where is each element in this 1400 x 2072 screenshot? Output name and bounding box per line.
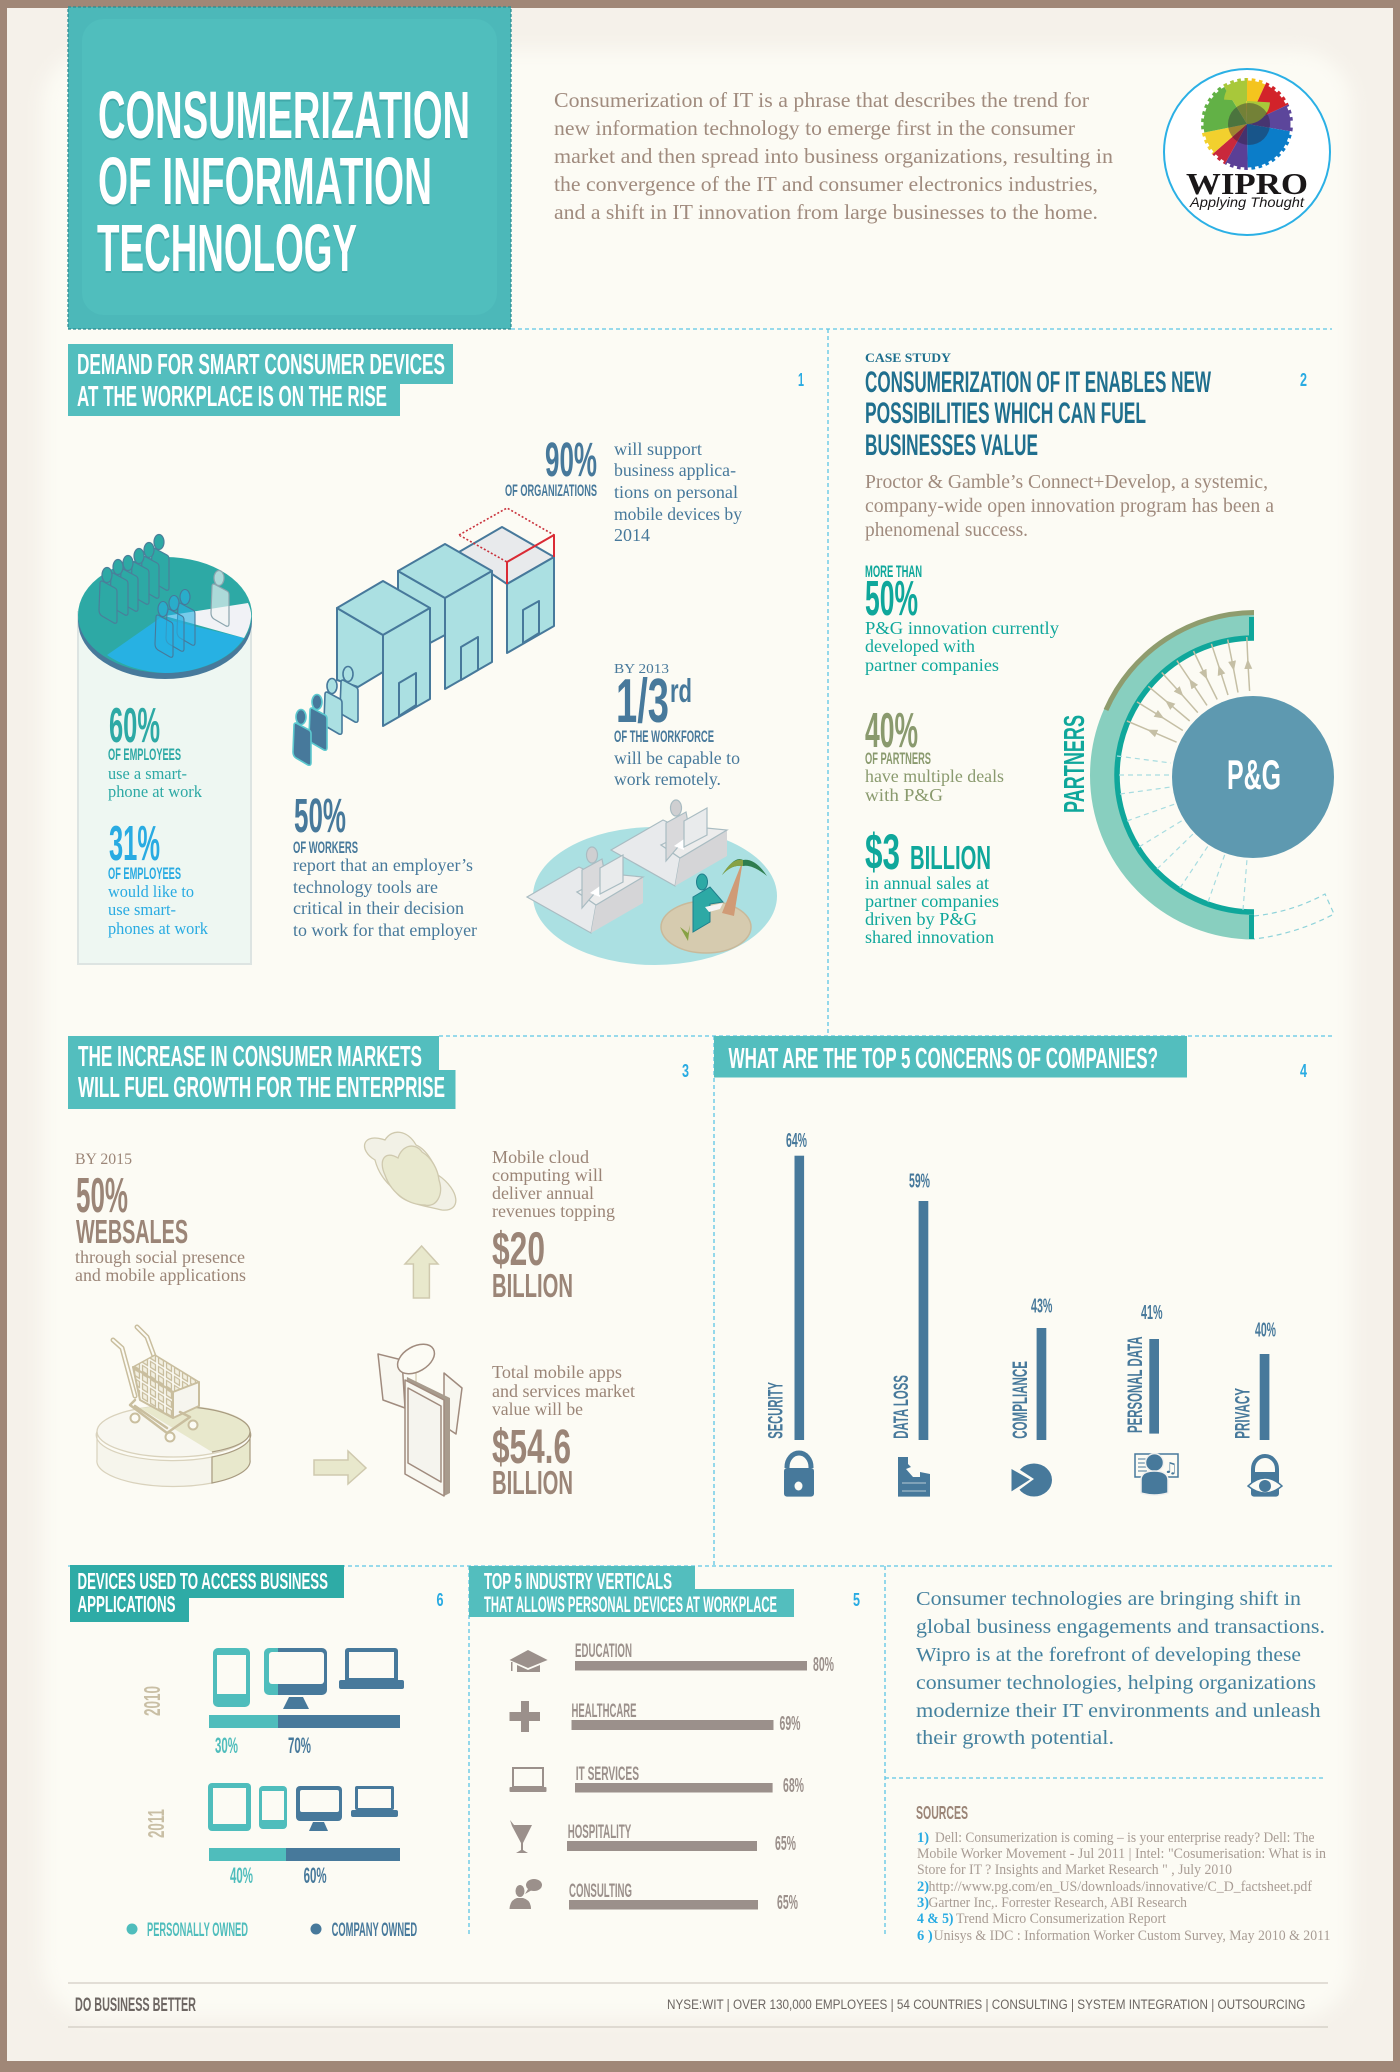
heading 3: WILL FUEL GROWTH FOR THE ENTERPRISE — [78, 1072, 445, 1104]
arrow: right — [314, 1451, 366, 1484]
row: hospitality 65%: 65% — [775, 1833, 796, 1855]
row: it services 68%: 68% — [783, 1775, 804, 1797]
stat: 50% websales: through social presence — [75, 1247, 245, 1267]
closing statement: Wipro is at the forefront of developing these — [916, 1644, 1301, 1666]
partner diagram — [1059, 612, 1334, 939]
bar: compliance 43%: 43% — [1031, 1295, 1053, 1317]
intro paragraph — [554, 88, 1114, 224]
intro paragraph: Consumerization of IT is a phrase that describes the trend for — [554, 88, 1089, 112]
stat: one third: work remotely. — [614, 769, 721, 789]
stat: $20 billion: Mobile cloud — [492, 1147, 589, 1167]
sources: http://www.pg.com/en_US/downloads/innovative/C_D_factsheet.pdf — [928, 1879, 1312, 1895]
stat: 60% — [108, 699, 202, 801]
sources: Gartner Inc,. Forrester Research, ABI Research — [928, 1895, 1188, 1911]
stat: one third: rd — [670, 672, 692, 709]
heading 6 — [70, 1565, 344, 1622]
stat: 40% of partners: OF PARTNERS — [865, 749, 931, 768]
stat: 31%: use smart- — [108, 900, 176, 919]
stat: 50% of workers: critical in their decision — [293, 898, 464, 918]
panel: devices used: COMPANY OWNED — [332, 1920, 417, 1941]
heading 5: TOP 5 INDUSTRY VERTICALS — [484, 1568, 672, 1594]
stat: 50% websales: 50% — [76, 1169, 128, 1223]
sources: Dell: Consumerization is coming – is your enterprise ready? Dell: The — [935, 1830, 1314, 1846]
heading 5 — [469, 1566, 794, 1617]
stat: $3 billion: partner companies — [865, 891, 999, 911]
stat: 31%: OF EMPLOYEES — [108, 864, 181, 883]
row: healthcare 69%: 69% — [780, 1713, 801, 1735]
stat: more than 50% — [865, 562, 1059, 675]
pie chart — [78, 534, 252, 679]
row: consulting 65%: CONSULTING — [569, 1881, 632, 1902]
people on pie — [99, 534, 169, 623]
stat: 60%: phone at work — [108, 782, 202, 801]
stat: $54.6 billion: Total mobile apps — [492, 1362, 622, 1382]
icon: graduation cap — [510, 1650, 548, 1672]
people queue — [293, 666, 358, 765]
illustration: remote work — [527, 800, 777, 965]
heading 3 — [68, 1036, 456, 1109]
bar: data loss 59%: DATA LOSS — [890, 1375, 913, 1439]
icon: personal data: ♫ — [1164, 1459, 1177, 1477]
ghost arc — [1254, 894, 1334, 939]
partners label: PARTNERS — [1059, 715, 1091, 813]
heading 4 — [714, 1036, 1187, 1078]
sources: SOURCES — [916, 1803, 968, 1823]
bar: compliance 43% — [1009, 1295, 1053, 1440]
case study intro: company-wide open innovation program has been a — [865, 495, 1274, 517]
number 5: 5 — [853, 1590, 860, 1610]
sources: 1) — [917, 1830, 929, 1846]
share bar 2011: 60% — [304, 1863, 327, 1888]
illustration: phone and apps — [378, 1338, 462, 1496]
panel: top 5 concerns — [714, 1036, 1307, 1497]
stat: one third: BY 2013 — [614, 662, 669, 677]
wordmark: WIPRO — [1186, 166, 1308, 201]
stat: $54.6 billion — [492, 1362, 635, 1501]
number 2: 2 — [1300, 370, 1307, 390]
icon: cross — [510, 1701, 540, 1732]
year label 2011: 2011 — [143, 1809, 169, 1838]
row: hospitality 65%: HOSPITALITY — [568, 1822, 631, 1843]
title: OF INFORMATION — [98, 144, 432, 219]
icon: compliance pie — [1011, 1464, 1052, 1496]
row: education 80%: EDUCATION — [575, 1641, 632, 1662]
illustration: cart on pie — [96, 1327, 251, 1486]
title — [97, 78, 470, 286]
arrow: up — [405, 1246, 438, 1298]
closing statement: Consumer technologies are bringing shift in — [916, 1588, 1301, 1610]
bar: privacy 40% — [1232, 1320, 1276, 1440]
closing statement: global business engagements and transactions. — [916, 1616, 1325, 1638]
stat: 40% of partners: 40% — [865, 704, 918, 758]
row: consulting 65% — [510, 1879, 798, 1914]
number 3: 3 — [682, 1061, 689, 1081]
heading 2 — [865, 351, 1211, 462]
stat: 50% of workers: report that an employer’s — [293, 855, 473, 875]
heading 3: THE INCREASE IN CONSUMER MARKETS — [78, 1041, 422, 1073]
bar: privacy 40%: 40% — [1255, 1320, 1276, 1342]
sources: Mobile Worker Movement - Jul 2011 | Intel: "Cosumerisation: What is in — [917, 1846, 1327, 1862]
legend: PERSONALLY OWNED — [147, 1920, 248, 1941]
bar: security 64% — [765, 1130, 807, 1440]
case study intro — [865, 471, 1274, 541]
bar: security 64%: SECURITY — [765, 1382, 788, 1439]
stat: 50% of workers — [293, 790, 477, 940]
heading 2: CASE STUDY — [865, 351, 951, 365]
stat: 60%: OF EMPLOYEES — [108, 745, 181, 764]
bar: compliance 43%: COMPLIANCE — [1009, 1361, 1032, 1439]
stat: 31%: phones at work — [108, 919, 208, 938]
building 1 — [337, 581, 430, 726]
stat: 50% websales — [75, 1151, 246, 1285]
sources: Store for IT ? Insights and Market Research " , July 2010 — [917, 1862, 1232, 1878]
palm — [722, 859, 767, 916]
icon: cloud — [365, 1132, 456, 1210]
icon: privacy — [1248, 1456, 1282, 1497]
heading 1: AT THE WORKPLACE IS ON THE RISE — [77, 381, 387, 413]
stat: 50% of workers: 50% — [294, 790, 346, 843]
stat: $20 billion — [492, 1147, 615, 1304]
stat: 50% websales: and mobile applications — [75, 1265, 246, 1285]
sources: 6 ) — [917, 1928, 933, 1944]
row: education 80%: 80% — [813, 1654, 834, 1676]
stat: $54.6 billion: $54.6 — [492, 1421, 571, 1474]
year label 2010: 2010 — [139, 1686, 165, 1716]
island — [661, 901, 751, 953]
stat: 60%: use a smart- — [108, 764, 187, 783]
heading 2: POSSIBILITIES WHICH CAN FUEL — [865, 397, 1146, 430]
stat: 90%: mobile devices by — [614, 504, 742, 524]
icon: data loss — [898, 1457, 930, 1497]
building 2 — [398, 544, 492, 689]
stat: $20 billion: BILLION — [492, 1267, 573, 1304]
share bar 2010: 30% — [215, 1733, 238, 1758]
stat: 40% of partners: with P&G — [865, 785, 943, 805]
icon: consultant — [510, 1879, 542, 1909]
stat: more than 50%: MORE THAN — [865, 562, 922, 581]
panel: consumer markets — [68, 1036, 689, 1501]
stat: $54.6 billion: BILLION — [492, 1464, 573, 1501]
bar: privacy 40%: PRIVACY — [1232, 1388, 1255, 1439]
stat: 31% — [108, 817, 208, 938]
icon: personal data — [1135, 1454, 1178, 1495]
stat: 90%: 90% — [545, 434, 597, 487]
building 3 — [459, 508, 554, 653]
stat: 40% of partners — [865, 704, 1004, 805]
heading 2: BUSINESSES VALUE — [865, 429, 1038, 462]
stat: 50% websales: WEBSALES — [76, 1213, 188, 1250]
share bar 2010 — [209, 1715, 400, 1758]
title: TECHNOLOGY — [97, 211, 357, 286]
wordmark: Applying Thought — [1189, 195, 1305, 210]
share bar 2011 — [209, 1848, 400, 1888]
stat: 90%: OF ORGANIZATIONS — [505, 481, 597, 500]
sources: Trend Micro Consumerization Report — [956, 1911, 1166, 1927]
stats panel with pie — [78, 534, 252, 964]
share bar 2011: 40% — [230, 1863, 253, 1888]
stat: 50% of workers: technology tools are — [293, 877, 438, 897]
bar: data loss 59% — [890, 1171, 930, 1440]
footer: NYSE:WIT | OVER 130,000 EMPLOYEES | 54 COUNTRIES | CONSULTING | SYSTEM INTEGRATION | OUTSOURCING — [667, 1997, 1305, 2012]
bar: data loss 59%: 59% — [909, 1171, 930, 1193]
title panel — [68, 7, 511, 329]
sources: 2) — [917, 1879, 929, 1895]
desk back — [611, 800, 727, 886]
stat: 50% websales: BY 2015 — [75, 1151, 132, 1168]
intro paragraph: and a shift in IT innovation from large businesses to the home. — [554, 200, 1098, 224]
stat: one third: OF THE WORKFORCE — [614, 727, 714, 746]
heading 6: DEVICES USED TO ACCESS BUSINESS — [78, 1568, 328, 1594]
isometric buildings — [293, 508, 554, 765]
stat: 90%: tions on personal — [614, 482, 738, 502]
bar: personal data 41%: PERSONAL DATA — [1124, 1336, 1147, 1433]
stat: 90% — [505, 434, 742, 545]
stat: more than 50%: partner companies — [865, 655, 999, 675]
share bar 2010: 70% — [288, 1733, 311, 1758]
outer ring — [1103, 624, 1254, 927]
panel: devices used — [70, 1565, 444, 1941]
stat: 50% of workers: OF WORKERS — [293, 838, 358, 857]
stat: one third: 1/3 — [616, 667, 669, 736]
arrows — [1127, 637, 1250, 742]
stat: one third: will be capable to — [614, 748, 740, 768]
stat: 50% of workers: to work for that employer — [293, 920, 477, 940]
stat: 90%: will support — [614, 439, 702, 459]
intro paragraph: the convergence of the IT and consumer electronics industries, — [554, 172, 1098, 196]
sources: 3) — [917, 1895, 929, 1911]
footer — [68, 1982, 1328, 2028]
heading 1 — [68, 344, 453, 416]
desk front — [527, 847, 643, 933]
stat: $3 billion: in annual sales at — [865, 873, 989, 893]
stat: $20 billion: $20 — [492, 1222, 545, 1275]
stat: more than 50%: P&G innovation currently — [865, 618, 1059, 638]
closing statement: their growth potential. — [916, 1727, 1114, 1749]
row: education 80% — [510, 1641, 834, 1676]
sources: Unisys & IDC : Information Worker Custom Survey, May 2010 & 2011 — [934, 1928, 1330, 1944]
row: hospitality 65% — [510, 1820, 796, 1855]
row: healthcare 69% — [510, 1701, 801, 1735]
stat: $20 billion: revenues topping — [492, 1201, 615, 1221]
number 1: 1 — [798, 370, 804, 390]
panel: industry verticals — [469, 1566, 860, 1914]
stat: $54.6 billion: value will be — [492, 1399, 583, 1419]
heading 1: DEMAND FOR SMART CONSUMER DEVICES — [77, 349, 445, 381]
stat: $3 billion — [865, 824, 999, 947]
intro paragraph: new information technology to emerge first in the consumer — [554, 116, 1075, 140]
closing statement: consumer technologies, helping organizations — [916, 1672, 1316, 1694]
stat: 60%: 60% — [109, 699, 160, 753]
icon: laptop — [510, 1768, 546, 1792]
row: healthcare 69%: HEALTHCARE — [572, 1701, 636, 1722]
stat: $3 billion: driven by P&G — [865, 909, 977, 929]
case study intro: Proctor & Gamble’s Connect+Develop, a systemic, — [865, 471, 1268, 493]
icon: cart — [113, 1327, 199, 1442]
P&G circle — [1172, 696, 1334, 858]
icon: sunflower — [1202, 78, 1292, 170]
icon: martini glass — [510, 1820, 532, 1853]
logo: Wipro — [1164, 69, 1330, 235]
stat: $54.6 billion: and services market — [492, 1381, 635, 1401]
stat: more than 50%: developed with — [865, 636, 975, 656]
panel: case study — [865, 351, 1334, 947]
icon: lock — [784, 1453, 814, 1497]
row: it services 68%: IT SERVICES — [576, 1764, 639, 1785]
icons 2010 devices — [213, 1648, 404, 1709]
number 4: 4 — [1300, 1061, 1307, 1081]
row: consulting 65%: 65% — [777, 1892, 798, 1914]
sources — [916, 1803, 1330, 1944]
stat: 31%: 31% — [109, 817, 160, 871]
icons 2011 devices — [208, 1783, 398, 1831]
stat: one third — [614, 662, 740, 789]
number 6: 6 — [436, 1590, 444, 1610]
bar: personal data 41% — [1124, 1302, 1163, 1434]
stat: 40% of partners: have multiple deals — [865, 766, 1004, 786]
stat: 90%: business applica- — [614, 460, 736, 480]
heading 5: THAT ALLOWS PERSONAL DEVICES AT WORKPLACE — [484, 1592, 777, 1617]
footer: DO BUSINESS BETTER — [75, 1995, 196, 2016]
bar: security 64%: 64% — [786, 1130, 807, 1152]
bar: personal data 41%: 41% — [1141, 1302, 1163, 1324]
row: it services 68% — [510, 1764, 804, 1797]
stat: 31%: would like to — [108, 882, 194, 901]
stat: $20 billion: deliver annual — [492, 1183, 594, 1203]
stat: $20 billion: computing will — [492, 1165, 603, 1185]
case study intro: phenomenal success. — [865, 519, 1028, 541]
heading 6: APPLICATIONS — [78, 1591, 176, 1617]
stat: $3 billion: shared innovation — [865, 927, 994, 947]
person with laptop — [680, 874, 723, 941]
intro paragraph: market and then spread into business organizations, resulting in — [554, 144, 1114, 168]
stat: $3 billion: BILLION — [910, 839, 991, 876]
stat: more than 50%: 50% — [865, 572, 918, 626]
stat: $3 billion: $3 — [865, 824, 900, 880]
P&G circle: P&G — [1227, 751, 1281, 798]
sources: 4 & 5) — [917, 1911, 954, 1927]
closing statement — [916, 1588, 1325, 1749]
stat: 90%: 2014 — [614, 525, 650, 545]
panel: demand for smart devices — [68, 344, 804, 965]
title: CONSUMERIZATION — [98, 78, 470, 153]
closing statement: modernize their IT environments and unleash — [916, 1700, 1321, 1722]
